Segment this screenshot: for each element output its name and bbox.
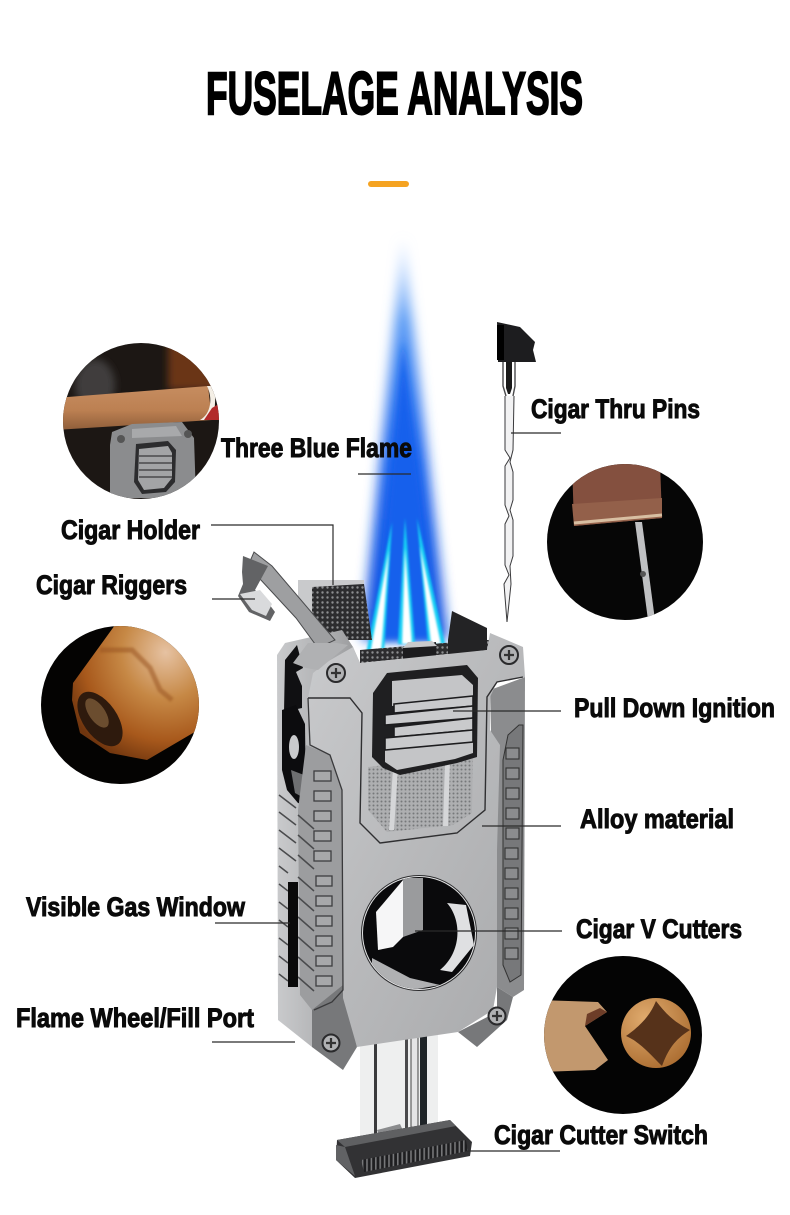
callout: Cigar Holder xyxy=(61,515,333,585)
component: side wall xyxy=(277,630,360,1060)
component: upper dark cavity xyxy=(284,645,303,712)
component: screws xyxy=(322,646,518,1052)
panel: punched cigar photo xyxy=(40,622,202,785)
component: front plate xyxy=(308,633,525,1047)
component: side ribs xyxy=(279,795,314,991)
orange accent bar xyxy=(368,181,409,187)
callout: Cigar Thru Pins: Cigar Thru Pins xyxy=(531,394,700,424)
component: cigar cutter slider tube xyxy=(360,1035,438,1150)
callout: Cigar Cutter Switch: Cigar Cutter Switch xyxy=(494,1120,708,1150)
component: gas window xyxy=(288,882,298,987)
component: cigar cutter window xyxy=(360,875,480,995)
callout: Visible Gas Window: Visible Gas Window xyxy=(26,892,246,922)
component: mesh panel xyxy=(368,755,473,832)
component: back mesh xyxy=(298,580,490,663)
component: flip lid xyxy=(238,552,348,670)
callout: Three Blue Flame: Three Blue Flame xyxy=(221,433,412,463)
component: cutter switch xyxy=(336,1120,472,1178)
component: left plate edge xyxy=(308,698,343,1010)
panel: cigar holder photo xyxy=(63,343,219,499)
component: ignition button xyxy=(372,665,478,775)
panel: v-cut cigar photo xyxy=(544,956,702,1114)
component: lower corner trims xyxy=(312,985,357,1070)
callout: Cigar Riggers: Cigar Riggers xyxy=(36,570,187,600)
panel: thru pin photo xyxy=(545,460,705,625)
component: rib blocks left xyxy=(314,771,332,986)
component: lower right trim xyxy=(458,987,513,1047)
callout: Flame Wheel/Fill Port: Flame Wheel/Fill Port xyxy=(16,1003,254,1033)
icon: cigar thru pin xyxy=(497,322,536,622)
callout: Cigar Holder: Cigar Holder xyxy=(61,515,200,545)
callout: Alloy material: Alloy material xyxy=(580,804,734,834)
component: rear dark tab xyxy=(448,611,487,655)
icon: lighter body xyxy=(238,552,525,1178)
component: inner frame line xyxy=(308,677,523,843)
callout: Cigar V Cutters: Cigar V Cutters xyxy=(576,914,742,944)
icon: three blue flames xyxy=(362,238,448,654)
component: right side rail xyxy=(490,677,525,997)
component: left rib column xyxy=(298,745,343,1010)
